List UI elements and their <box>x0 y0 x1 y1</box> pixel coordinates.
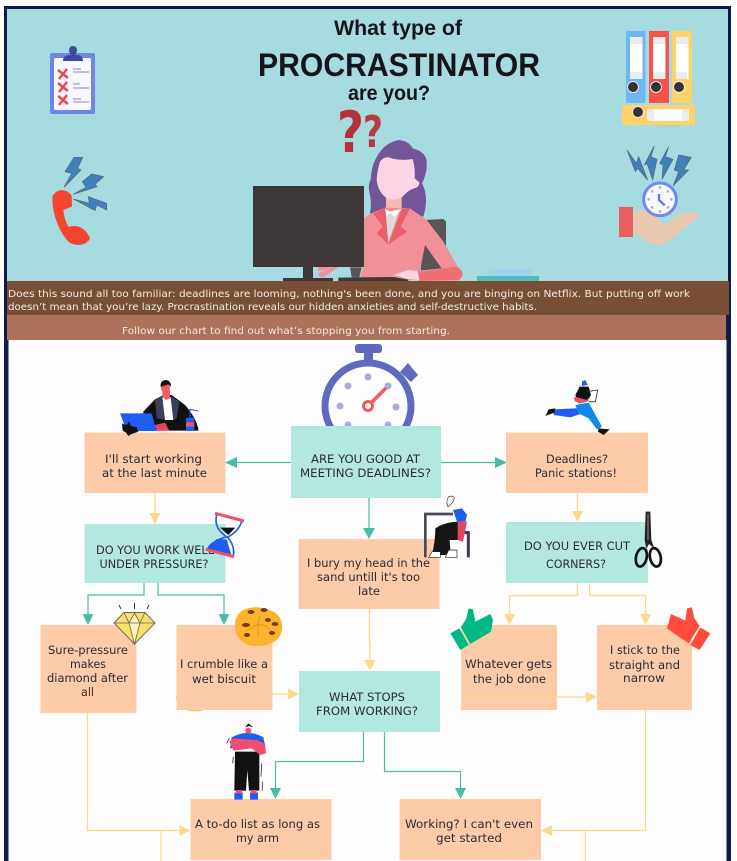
icon: slumped figure at desk <box>425 496 468 557</box>
box: sure-pressure diamond: makes <box>70 657 106 671</box>
panel: intro text: doesn’t mean that you’re lazy. Procrastination reveals our hidden anxieties and self-destructive habits. <box>8 302 537 313</box>
box: bury my head: sand untill it's too <box>317 570 420 584</box>
title <box>258 17 540 105</box>
icon: standing figure with crossed arms <box>227 723 266 800</box>
icon: hourglass <box>206 513 244 557</box>
icon: question marks: ? <box>337 100 364 166</box>
box: panic stations: Deadlines? <box>546 452 608 466</box>
box: wet biscuit: wet biscuit <box>192 672 256 686</box>
icon: thumb up green <box>450 608 493 650</box>
icon: man at laptop <box>120 380 199 436</box>
box: work under pressure question: DO YOU WORK WELL <box>96 543 215 557</box>
box: last minute: at the last minute <box>102 466 207 480</box>
box: meeting deadlines question: MEETING DEADLINES? <box>300 466 431 480</box>
box: sure-pressure diamond: Sure-pressure <box>48 643 128 657</box>
box: last minute: I'll start working <box>105 452 202 466</box>
icon: thumb up red <box>667 607 710 650</box>
box: whatever gets the job done <box>461 625 557 710</box>
box: straight and narrow: I stick to the <box>610 643 680 657</box>
box: sure-pressure diamond: diamond after <box>47 671 128 685</box>
box: last minute <box>84 432 226 493</box>
box: sure-pressure diamond: all <box>81 685 94 699</box>
box: sure-pressure diamond <box>40 625 136 713</box>
icon: hand holding clock <box>619 146 699 245</box>
box: meeting deadlines question: ARE YOU GOOD AT <box>311 452 421 466</box>
box: bury my head <box>298 539 440 609</box>
box: work under pressure question <box>84 524 226 583</box>
box: cut corners question: DO YOU EVER CUT <box>524 539 631 553</box>
box: to-do list: A to-do list as long as <box>195 817 320 831</box>
icon: stopwatch <box>325 344 418 449</box>
box: can't get started: Working? I can't even <box>405 817 533 831</box>
icon: clipboard <box>50 46 95 114</box>
icon: scissors <box>634 512 662 568</box>
title: are you? <box>348 82 430 105</box>
box: work under pressure question: UNDER PRESSURE? <box>100 557 208 571</box>
icon: cookie <box>235 607 282 646</box>
panel: chart prompt: Follow our chart to find out what’s stopping you from starting. <box>122 326 450 337</box>
panel: intro text: Does this sound all too familiar: deadlines are looming, nothing's been done, and you are binging on Netflix. But putting off work <box>8 289 690 300</box>
icon: ringing phone <box>52 157 107 245</box>
box: wet biscuit: I crumble like a <box>180 657 268 671</box>
box: what stops question <box>299 671 440 732</box>
icon: diamond <box>114 603 155 644</box>
icon: binders <box>622 31 695 125</box>
box: bury my head: late <box>358 584 380 598</box>
box: whatever gets the job done: Whatever gets <box>465 657 552 671</box>
books on desk <box>477 269 539 281</box>
box: can't get started <box>400 799 541 860</box>
icon: running figure <box>545 380 610 435</box>
box: meeting deadlines question <box>291 426 441 498</box>
box: cut corners question: CORNERS? <box>546 557 606 571</box>
panel: chart prompt <box>7 315 726 340</box>
icon: monitor <box>253 186 364 281</box>
box: to-do list <box>190 799 332 860</box>
box: straight and narrow: narrow <box>623 671 665 685</box>
box: straight and narrow <box>597 625 692 710</box>
box: cut corners question <box>506 522 648 583</box>
box: panic stations: Panic stations! <box>535 466 617 480</box>
box: to-do list: my arm <box>236 831 279 845</box>
box: can't get started: get started <box>436 831 502 845</box>
box: whatever gets the job done: the job done <box>473 672 546 686</box>
box: what stops question: FROM WORKING? <box>316 704 418 718</box>
box: panic stations <box>506 432 648 493</box>
box: bury my head: I bury my head in the <box>307 556 430 570</box>
panel: intro text <box>7 281 729 315</box>
connectors <box>82 457 651 861</box>
box: straight and narrow: straight and <box>609 658 680 672</box>
box: wet biscuit <box>176 625 272 712</box>
title: What type of <box>334 17 463 40</box>
title: PROCRASTINATOR <box>258 47 540 83</box>
box: what stops question: WHAT STOPS <box>329 690 405 704</box>
illustration: woman at desk <box>338 140 463 281</box>
icon: question marks: ? <box>363 107 383 158</box>
panel: header banner <box>7 9 728 281</box>
